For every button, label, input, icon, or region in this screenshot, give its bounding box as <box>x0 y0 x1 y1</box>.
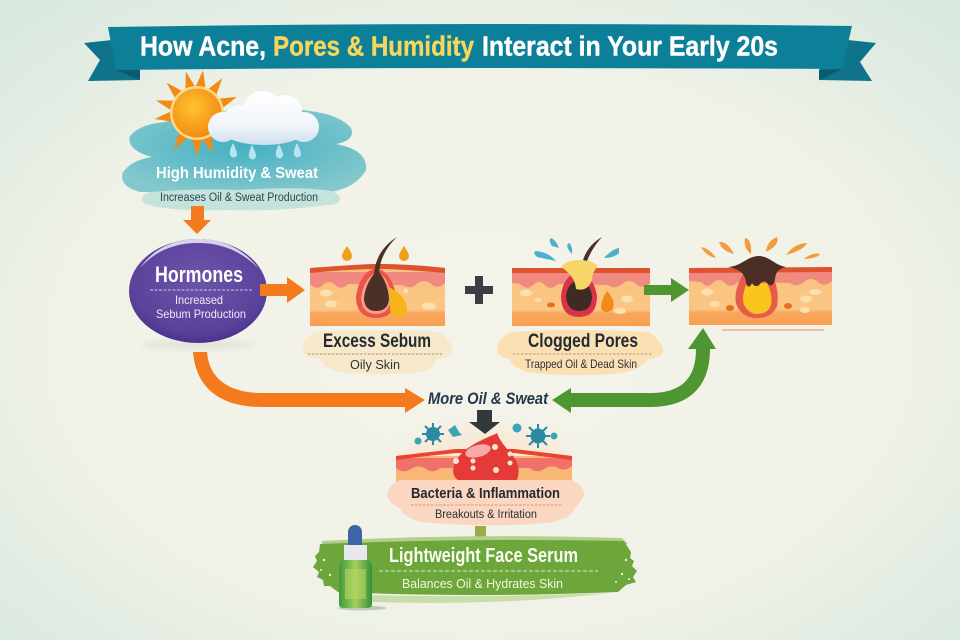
icon: hair <box>583 237 602 261</box>
banner ribbon <box>108 24 852 70</box>
pale upper edge <box>322 536 628 546</box>
label blob <box>497 330 663 375</box>
panel: clogged pores <box>497 237 663 375</box>
text: oily skin: Oily Skin <box>350 358 400 372</box>
skin cross-section <box>689 237 832 330</box>
icon: oil plug <box>561 260 598 290</box>
icon: sun <box>154 70 239 156</box>
green brush stroke <box>313 540 637 595</box>
title text: Pores & Humidity <box>273 30 474 62</box>
skin cross-section <box>512 237 650 326</box>
connector stem <box>475 526 486 538</box>
icon: yellow pus <box>743 283 772 314</box>
label blob <box>303 330 452 374</box>
purple ellipse <box>129 239 267 343</box>
panel: high humidity and sweat <box>122 70 366 210</box>
icon: sebum droplet <box>389 287 407 318</box>
arrow: clogged pores to pimple <box>644 278 689 302</box>
skin cross-section <box>310 237 445 326</box>
panel: bacteria and inflammation <box>387 423 584 525</box>
icon: dark clogged follicle <box>566 280 592 311</box>
title banner <box>84 24 876 81</box>
arrow: green double arrow <box>552 328 716 413</box>
glow <box>397 429 573 501</box>
ellipse shadow <box>141 340 257 350</box>
icon: hair follicle <box>364 237 397 311</box>
arrow: humidity to hormones <box>183 206 211 234</box>
icon: orange splashes <box>701 237 820 259</box>
pale lower edge <box>372 593 610 603</box>
icon: bacteria right <box>512 424 558 448</box>
pale subtitle blob <box>142 188 340 210</box>
heading: excess sebum: Excess Sebum <box>323 331 431 352</box>
heading: high humidity: High Humidity & Sweat <box>156 165 319 182</box>
icon: inflamed bump <box>453 433 519 482</box>
arrow: down to bacteria <box>469 410 500 434</box>
text: increased sebum: Increased <box>175 293 223 307</box>
teal cloud blob <box>122 109 366 192</box>
icon: orange droplet <box>601 291 614 312</box>
text: trapped oil: Trapped Oil & Dead Skin <box>525 357 637 371</box>
arrow: hormones to more oil <box>193 352 425 413</box>
icon: water droplets <box>534 238 619 261</box>
heading: clogged pores: Clogged Pores <box>528 331 638 352</box>
banner left tail <box>84 40 140 81</box>
text: balances: Balances Oil & Hydrates Skin <box>402 576 563 591</box>
panel: blocked pore <box>689 237 832 330</box>
text: increased sebum: Sebum Production <box>156 307 246 321</box>
text: breakouts: Breakouts & Irritation <box>435 509 537 521</box>
icon: swollen follicle <box>735 274 778 318</box>
title text: Interact in Your Early 20s <box>482 30 778 62</box>
heading: serum: Lightweight Face Serum <box>389 545 578 567</box>
banner right tail <box>819 40 876 81</box>
icon: bacteria left <box>414 423 462 445</box>
brush speckles <box>320 559 630 583</box>
title text: How Acne, <box>140 30 266 62</box>
icon: dark plug <box>728 256 786 287</box>
label blob <box>387 480 584 525</box>
text: increases oil: Increases Oil & Sweat Production <box>160 192 318 204</box>
panel: lightweight face serum <box>313 525 637 610</box>
icon: rain cloud <box>208 91 319 160</box>
panel: excess sebum <box>303 237 452 374</box>
underline <box>722 329 824 331</box>
ellipse highlight rim <box>140 239 258 268</box>
heading: bacteria: Bacteria & Inflammation <box>411 485 560 502</box>
heading: hormones: Hormones <box>155 262 243 287</box>
icon: serum bottle <box>338 525 386 610</box>
heading: more oil and sweat: More Oil & Sweat <box>428 389 549 408</box>
arrow: hormones to excess sebum <box>260 277 305 303</box>
skin cross-section <box>396 449 572 486</box>
banner fold shadows <box>116 69 842 80</box>
icon: plus sign <box>465 276 493 304</box>
panel: hormones <box>129 239 267 350</box>
